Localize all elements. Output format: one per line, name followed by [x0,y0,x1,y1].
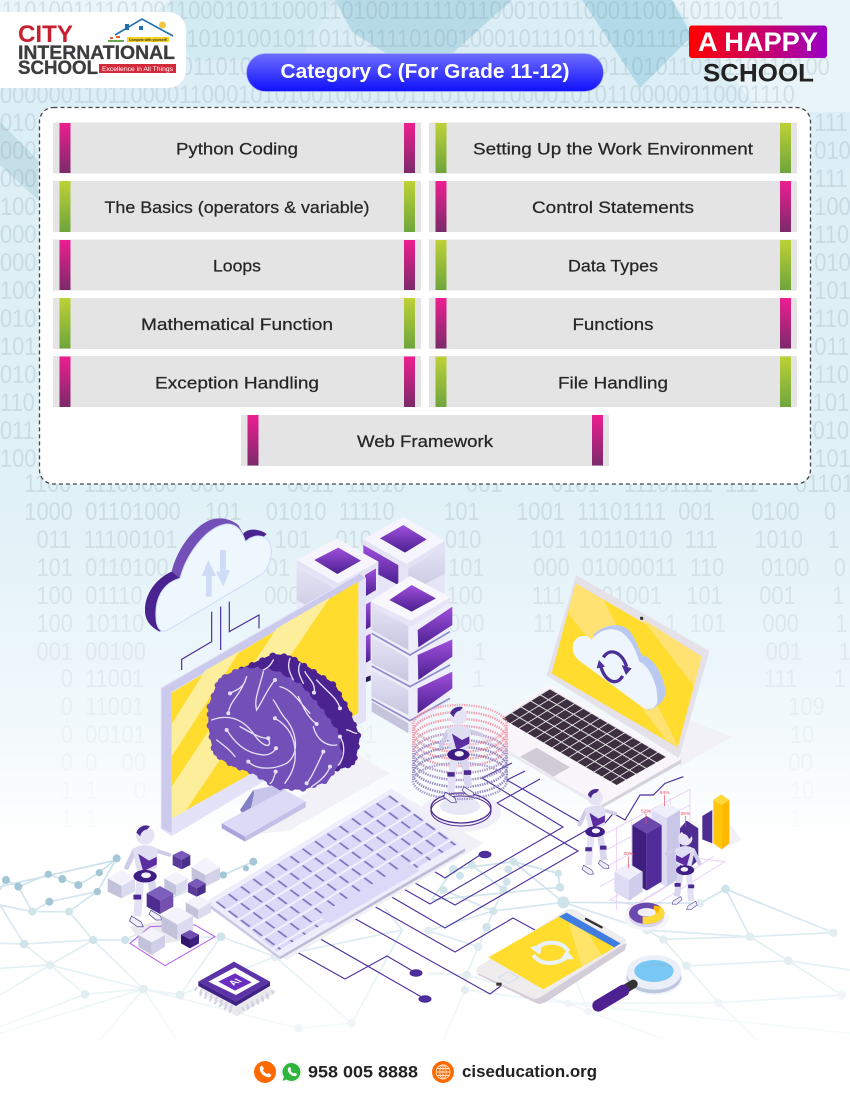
logo wordmark: SCHOOL [18,58,98,79]
topic: Functions [429,298,797,349]
line graph [603,777,683,825]
logo house icon: Compete with yourself! [129,37,167,42]
server tower: back [363,517,445,627]
floor shadow of bars [722,823,742,849]
logo wordmark: CITY [18,21,73,48]
robot pointing left [580,789,616,874]
binary digit pattern: 100 101 [0,277,850,304]
phone number: 958 005 8888 [308,1064,418,1082]
smartphone [476,909,627,1004]
topic: File Handling: File Handling [558,374,668,392]
logo wordmark: Excellence in All Things [102,66,174,73]
topic: Loops: Loops [213,256,261,276]
topic: Setting Up the Work Environment [429,122,797,174]
laptop trackpad [520,748,570,777]
brain illustration [210,656,358,788]
robot with cubes [108,825,277,1017]
laptop screen [548,577,708,757]
binary digit pattern: 101 011 [0,333,849,360]
laptop base [477,683,682,808]
panel: course topics [40,108,810,484]
topic: Mathematical Function [53,298,421,349]
bar chart with robots [580,777,742,930]
chart grid [600,789,725,910]
icon: globe [432,1061,454,1083]
AI chip [195,962,277,1017]
monitor with brain [162,574,390,842]
magnifying glass [598,955,682,1006]
server tower: left [297,538,378,683]
binary digit pattern: 100 01110 000 100 111 1001001 101 001 1 [0,582,844,609]
icon: phone [254,1061,276,1083]
monitor frame [162,574,365,835]
sync icon on phone [530,943,574,963]
badge: A Happy School: A HAPPY [698,27,818,57]
binary digit pattern: 100 101 [0,445,850,472]
binary digit pattern: 011 010 [0,417,849,444]
binary digit pattern: 000 010 [0,249,850,276]
topic: Setting Up the Work Environment: Setting Up the Work Environment [473,140,753,158]
cube floor outline [130,920,215,966]
monitor screen [172,582,358,818]
topic: Data Types [429,240,797,290]
binary digit pattern: 100 100 [0,193,850,220]
badge: A Happy School [689,26,827,88]
server tower: front [371,576,450,733]
binary digit pattern: 1000 01101000 101 01010 11110 101 1001 11101111 001 0100 0 [0,498,836,525]
topic: Control Statements: Control Statements [532,198,694,217]
binary digit pattern [0,0,850,832]
robot pointing at chart [666,831,699,909]
binary digit pattern: 0 11001 109 0 [0,693,850,720]
binary digit pattern: 1010010101001100110100010011001010011011101001011001101011011110110100 [0,53,830,80]
website: ciseducation.org [462,1062,597,1081]
topic: The Basics: The Basics (operators & variable) [104,198,370,217]
binary digit pattern: 010 110 [0,361,849,388]
topic: Data Types: Data Types [568,256,658,276]
category heading pill: Category C (For Grade 11-12) [280,61,570,83]
light cubes [108,857,220,919]
topic: Exception Handling: Exception Handling [155,374,319,392]
logo: City International School [0,12,186,88]
bar 35%: 35% [680,811,691,817]
topic: Mathematical Function: Mathematical Function [141,315,333,334]
bar 84%: 84% [660,790,670,796]
binary digit pattern: 001 00100 1 010 001 1 [0,638,850,665]
badge: A Happy School: SCHOOL [703,60,814,88]
topic: The Basics [53,181,421,232]
binary digit pattern: 101 0110100 01 101 000 01000011 110 0100 0 [0,554,846,581]
topic: Python Coding [53,122,421,174]
yellow bar [713,794,729,849]
binary digit pattern: 100 10110 000 11 1 101 000 1 [0,610,848,637]
robot figure [127,825,169,927]
binary digit pattern: 1 1 1 [0,805,802,832]
logo wordmark: INTERNATIONAL [18,42,175,64]
network mesh background [0,854,850,1040]
cloud upload icon with connectors [145,518,271,670]
binary digit pattern: 1 1 0 10 0 [0,777,850,804]
binary digit pattern: 0000001101100001100010101001000110111010111000010101100000110001110 [0,81,795,108]
server racks [297,517,450,733]
logo house icon [108,19,173,42]
bar 35% [680,811,698,877]
laptop shadow [680,717,732,767]
AI chip: AI [226,978,245,987]
topic: Loops [53,240,421,290]
binary digit pattern: 0 0 00 11 00 0 [0,749,850,776]
logo wordmark [18,21,176,79]
purple cubes [147,851,206,914]
small purple bar [702,810,712,843]
data cylinder hologram with robot [413,705,507,832]
monitor shadow and stand [222,757,390,842]
binary digit pattern: 010 111 [0,109,848,136]
donut chart [624,903,669,930]
bar 20% [614,851,643,901]
topic: Functions: Functions [572,315,654,334]
bar 84% [652,790,680,887]
bar 52% [632,808,662,891]
bar 20%: 20% [623,851,634,857]
topic: Control Statements [429,181,797,232]
lower cubes [138,907,199,955]
circuit wires [295,763,587,1003]
laptop [477,577,732,808]
keyboard [206,788,483,960]
category heading pill [246,54,604,92]
icon: whatsapp [281,1062,302,1082]
topic: File Handling [429,356,797,407]
topic: Python Coding: Python Coding [176,140,298,158]
binary digit pattern: 000 111 [0,165,848,192]
binary digit pattern: 0 00101 101 10 0 [0,721,850,748]
binary digit pattern: 0 11001 1 1 111 1 [0,665,846,692]
binary digit pattern: 110 101 [0,389,849,416]
contact footer [254,1061,597,1083]
bar 52%: 52% [641,808,652,814]
server tower: front purple panels [418,607,452,713]
binary digit pattern: 000 010 [0,137,850,164]
binary digit pattern: 000 110 [0,221,849,248]
topic: Exception Handling [53,356,421,407]
topic: Web Framework [241,415,609,466]
binary digit pattern: 0110100110010111101010010110110111101001000101110110101111001101010010 [0,25,823,52]
laptop keyboard [502,688,667,785]
topic: Web Framework: Web Framework [357,432,494,451]
binary digit pattern: 010 110 [0,305,849,332]
binary digit pattern: 011 11100101 101 010 010 101 10110110 111 1010 1 [0,526,839,553]
